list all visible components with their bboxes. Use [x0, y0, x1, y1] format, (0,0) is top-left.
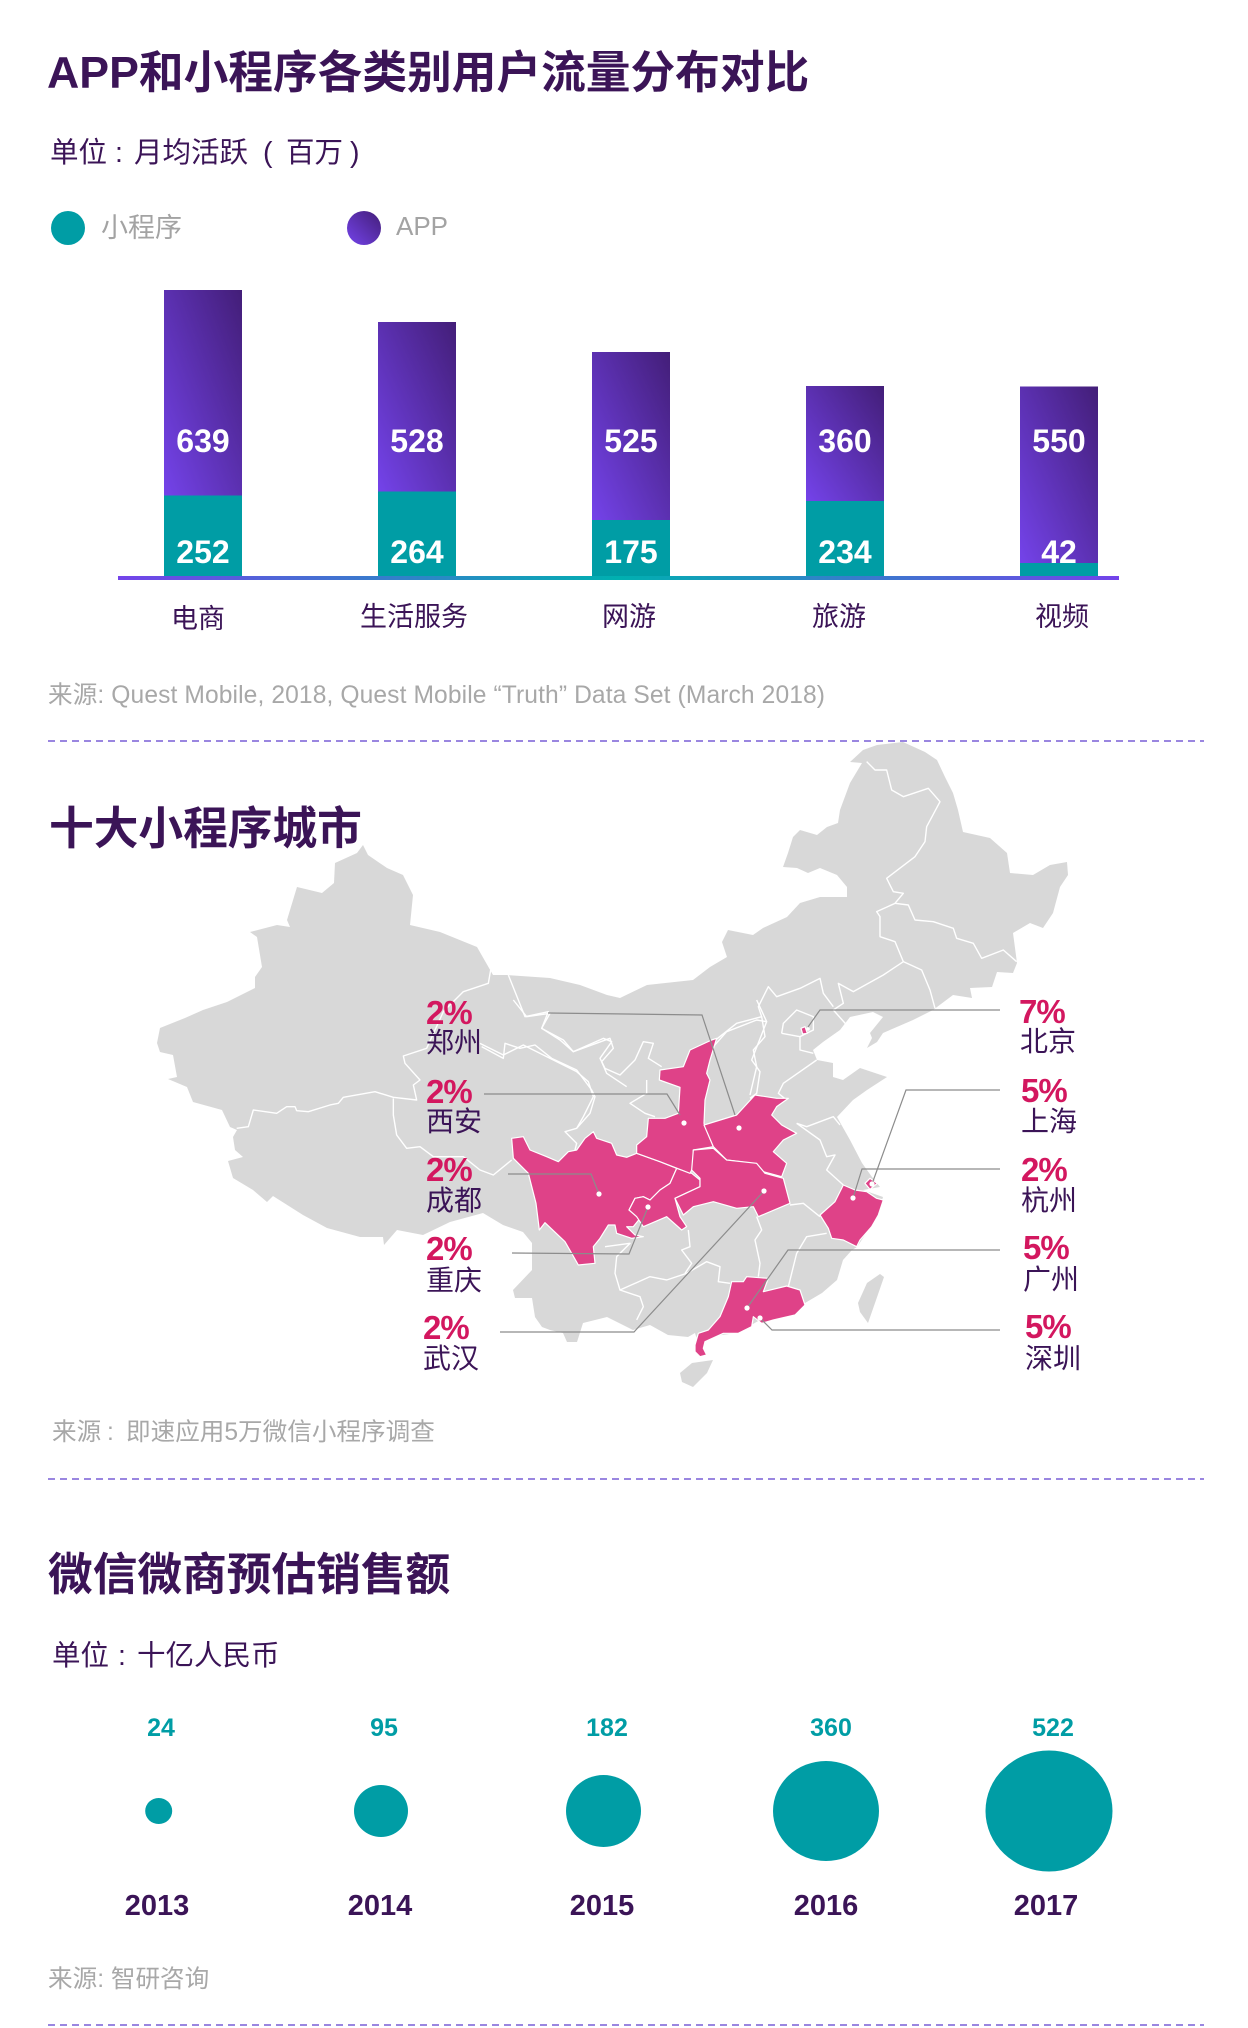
- bar: 视频: [1020, 386, 1098, 576]
- bar: 网游: [592, 352, 670, 576]
- bar: 网游: 175: [604, 534, 658, 570]
- provincial borders: northeast: [713, 762, 1017, 1095]
- label: 郑州: 2%: [426, 994, 472, 1031]
- source: survey: 来源: [52, 1419, 101, 1446]
- unit label: :: [118, 1640, 126, 1672]
- bar: 生活服务: [378, 322, 456, 576]
- label: 深圳: 5%: [1025, 1308, 1071, 1345]
- label: 广州: 5%: [1023, 1229, 1069, 1266]
- bar: 生活服务: 528: [390, 423, 444, 459]
- bar: 电商: 252: [176, 534, 230, 570]
- legend: app: [347, 211, 448, 245]
- taiwan: [858, 1274, 884, 1323]
- unit label: 单位: [52, 1640, 109, 1672]
- bar: 电商: [164, 290, 242, 576]
- bar: 旅游: 234: [818, 534, 872, 570]
- map of china: [157, 742, 1068, 1387]
- provincial borders: centre and south: [480, 1000, 843, 1320]
- category labels: 电商: [171, 604, 225, 634]
- category labels: [171, 602, 1089, 634]
- label: 北京: 7%: [1019, 993, 1065, 1030]
- label: 西安: 西安: [426, 1106, 482, 1137]
- bubble: 2013: 2013: [125, 1890, 189, 1922]
- heading: wechat sales: 微信微商预估销售额: [48, 1551, 450, 1600]
- label: 西安: 2%: [426, 1073, 472, 1110]
- label: 北京: [1019, 993, 1076, 1057]
- bubble: 2017: 522: [1032, 1714, 1074, 1742]
- category labels: 网游: [602, 602, 656, 632]
- bubble: 2016: 360: [810, 1714, 852, 1742]
- shaanxi: [637, 1038, 717, 1173]
- label: 杭州: 杭州: [1021, 1185, 1077, 1216]
- bar: 旅游: [806, 386, 884, 576]
- category labels: 生活服务: [360, 602, 468, 632]
- label: 北京: 北京: [1020, 1026, 1076, 1057]
- hainan: [680, 1360, 713, 1387]
- label: 广州: [1023, 1229, 1079, 1295]
- label: 上海: [1021, 1072, 1077, 1137]
- unit label: :: [115, 137, 123, 169]
- highlighted provinces: coast: [695, 1178, 883, 1357]
- label: 杭州: [1021, 1151, 1077, 1216]
- bubble: 2014: 2014: [348, 1890, 412, 1922]
- legend: app: APP: [396, 211, 448, 241]
- bubble: 2014: 95: [370, 1714, 398, 1742]
- unit label: 月均活跃: [134, 137, 248, 169]
- label: 广州: 广州: [1023, 1264, 1079, 1295]
- label: 成都: 2%: [426, 1151, 472, 1188]
- label: 成都: 成都: [426, 1185, 482, 1216]
- bubble: 2015: [566, 1714, 641, 1922]
- label: 杭州: 2%: [1021, 1151, 1067, 1188]
- source: survey: 即速应用5万微信小程序调查: [126, 1418, 435, 1446]
- label: 武汉: [423, 1309, 479, 1374]
- bar: 电商: 639: [176, 423, 230, 459]
- bubble: 2013: [125, 1714, 189, 1922]
- zhejiang: [820, 1185, 883, 1247]
- guangdong: [695, 1277, 805, 1357]
- highlighted provinces: central: [512, 1027, 807, 1265]
- mainland outline: [157, 742, 1068, 1355]
- bubble: 2017: 2017: [1014, 1890, 1078, 1922]
- unit label: ): [350, 137, 360, 169]
- bubble chart: [125, 1714, 1112, 1922]
- label: 郑州: [426, 994, 482, 1058]
- legend: mini program: [51, 211, 182, 245]
- label: 武汉: 2%: [423, 1309, 469, 1346]
- unit label: 单位: [50, 137, 107, 169]
- stacked bar chart: [118, 290, 1119, 634]
- title: app vs mini-program: APP和小程序各类别用户流量分布对比: [47, 49, 809, 98]
- city dots: [596, 1027, 875, 1321]
- henan: [704, 1095, 797, 1177]
- source: survey: :: [107, 1419, 114, 1446]
- label: 上海: 5%: [1021, 1072, 1067, 1109]
- bar: 生活服务: 264: [390, 534, 444, 570]
- bubble: 2016: [773, 1714, 879, 1922]
- label: 重庆: 重庆: [426, 1265, 482, 1296]
- label: 重庆: 2%: [426, 1230, 472, 1267]
- bubble: 2017: [986, 1714, 1112, 1922]
- bubble: 2014: [348, 1714, 412, 1922]
- legend: [51, 211, 448, 245]
- axis line: [118, 576, 1119, 580]
- label: 西安: [426, 1073, 482, 1137]
- category labels: 旅游: [812, 602, 866, 632]
- bar: 旅游: 360: [818, 423, 872, 459]
- bar: 网游: 525: [604, 423, 658, 459]
- source: quest mobile: 来源: Quest Mobile, 2018, Quest Mobile “Truth” Data Set (March 2018): [48, 681, 825, 709]
- provincial borders: west: [237, 970, 512, 1175]
- leader lines: [484, 1010, 1000, 1332]
- heading: top ten cities: 十大小程序城市: [49, 805, 362, 854]
- bar: 视频: 550: [1032, 423, 1086, 459]
- label: 深圳: 深圳: [1025, 1343, 1081, 1374]
- bubble: 2015: 182: [586, 1714, 628, 1742]
- hubei: [675, 1148, 790, 1217]
- bubble: 2013: 24: [147, 1714, 175, 1742]
- beijing: [801, 1027, 807, 1034]
- label: 深圳: [1025, 1308, 1081, 1374]
- unit label: 百万: [286, 137, 343, 169]
- sichuan: [512, 1132, 677, 1265]
- category labels: 视频: [1035, 602, 1089, 632]
- label: 重庆: [426, 1230, 482, 1296]
- bubble: 2016: 2016: [794, 1890, 858, 1922]
- bubble: 2015: 2015: [570, 1890, 634, 1922]
- bar: 视频: 42: [1041, 534, 1077, 570]
- label: 成都: [426, 1151, 482, 1216]
- source: zhiyan: 来源: 智研咨询: [48, 1965, 209, 1993]
- legend: mini program: 小程序: [101, 213, 182, 243]
- label: 上海: 上海: [1021, 1106, 1077, 1137]
- label: 武汉: 武汉: [423, 1343, 479, 1374]
- chongqing: [629, 1168, 700, 1230]
- unit label: (: [263, 137, 273, 169]
- shanghai: [865, 1178, 877, 1189]
- label: 郑州: 郑州: [426, 1027, 482, 1058]
- unit label: 十亿人民币: [137, 1640, 280, 1672]
